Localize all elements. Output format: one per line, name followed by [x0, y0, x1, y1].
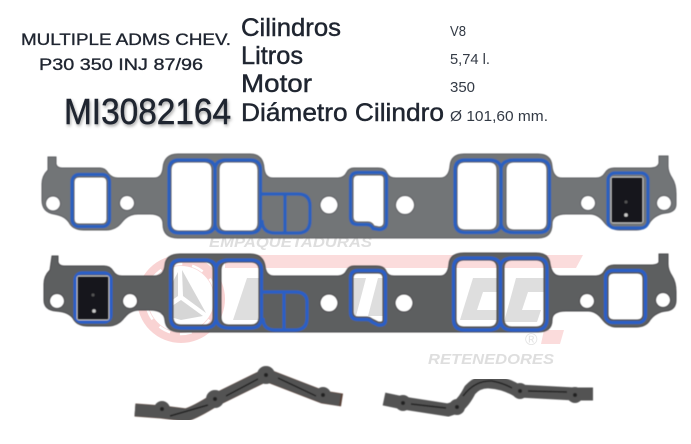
specification labels: Motor — [241, 70, 312, 98]
product title: MULTIPLE ADMS CHEV. — [21, 30, 231, 49]
specification labels: Cilindros — [241, 14, 341, 42]
specification values: 350 — [450, 79, 475, 96]
watermark text: retenedores: RETENEDORES — [428, 351, 554, 368]
specification values: Ø 101,60 mm. — [450, 108, 548, 125]
end strip: right — [384, 381, 593, 415]
part number: MI3082164 — [64, 91, 231, 132]
seal beads: upper — [72, 160, 648, 233]
specification labels: Litros — [241, 42, 303, 70]
product title — [21, 30, 231, 74]
seal beads: lower — [75, 258, 646, 330]
gasket: lower — [44, 253, 676, 332]
specification values — [450, 23, 548, 125]
watermark: registered mark: ® — [525, 330, 538, 349]
watermark text: empaquetaduras: EMPAQUETADURAS — [209, 235, 372, 251]
end strip: left — [135, 366, 342, 417]
specification labels — [241, 14, 444, 127]
gasket: upper — [42, 154, 676, 238]
dark plate: upper right — [611, 177, 643, 223]
dark plate: lower left — [77, 276, 109, 320]
watermark logo — [142, 255, 583, 349]
specification labels: Diámetro Cilindro — [241, 99, 444, 127]
part number: MI3082164 — [65, 93, 232, 134]
specification values: 5,74 l. — [450, 51, 490, 68]
specification values: V8 — [450, 23, 466, 40]
product title: P30 350 INJ 87/96 — [39, 55, 203, 74]
